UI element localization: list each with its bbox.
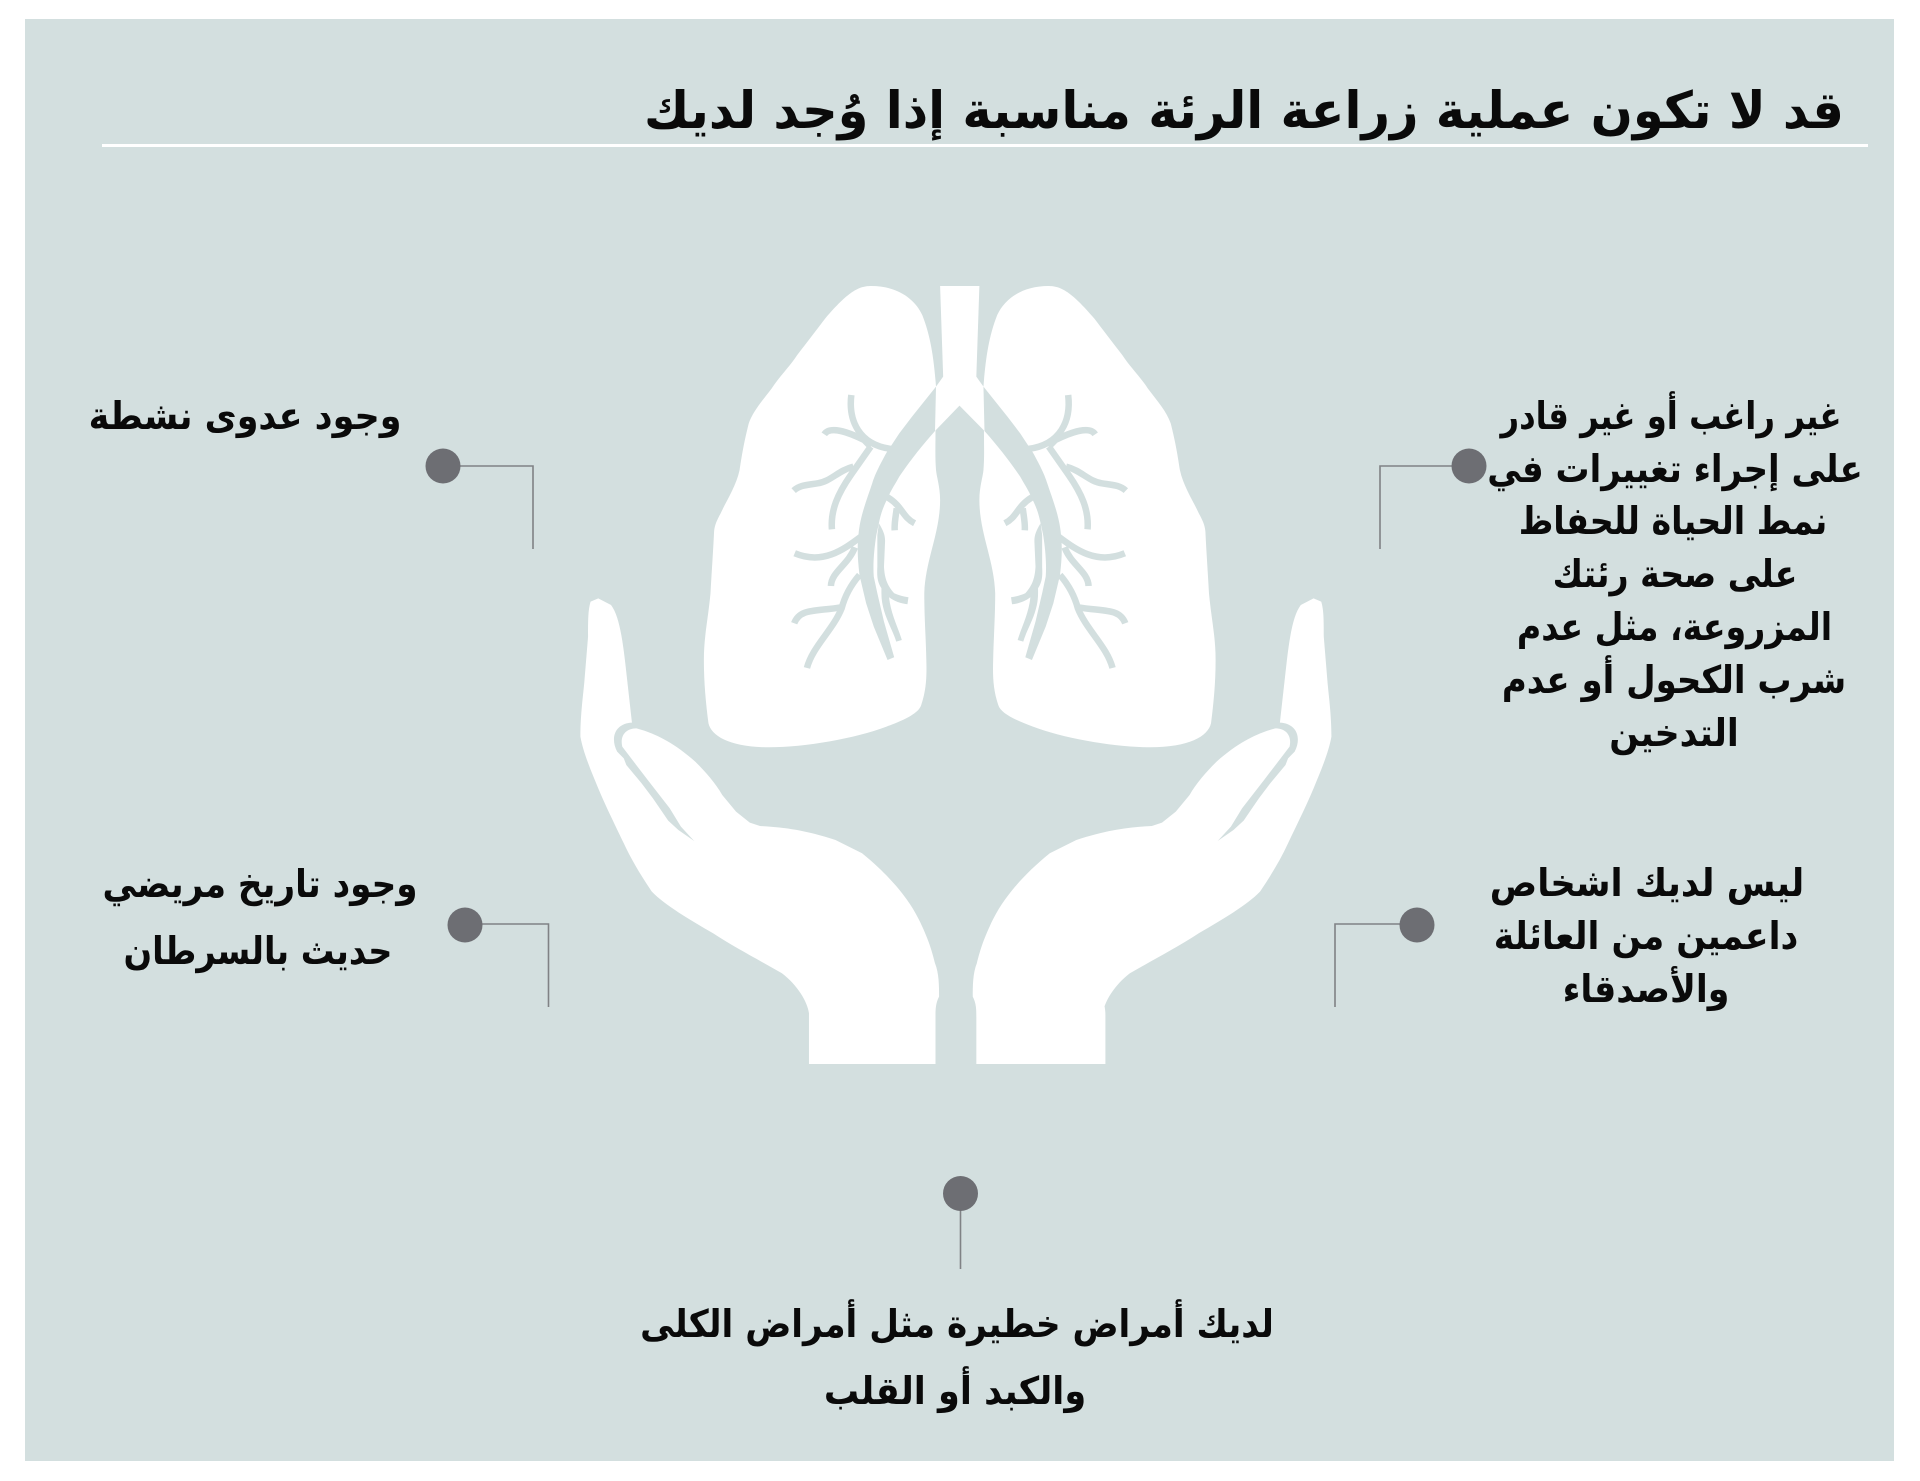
left hand <box>580 598 939 1064</box>
callout: lifestyle changes <box>1380 391 1863 755</box>
callout: no family support: داعمين من العائلة <box>1494 913 1798 958</box>
right hand <box>973 598 1331 1064</box>
right lung <box>979 286 1216 747</box>
callout: recent cancer history <box>103 861 549 1007</box>
callout: serious diseases: لديك أمراض خطيرة مثل أمراض الكلى <box>640 1299 1274 1346</box>
callout: serious diseases: والكبد أو القلب <box>824 1366 1086 1413</box>
callout: lifestyle changes: على إجراء تغييرات في <box>1487 448 1863 491</box>
icon: supporting hands <box>580 598 1331 1064</box>
callout: lifestyle changes: التدخين <box>1609 710 1739 755</box>
callout: lifestyle changes: المزروعة، مثل عدم <box>1517 606 1832 650</box>
title: قد لا تكون عملية زراعة الرئة مناسبة إذا وُجد لديك <box>644 80 1844 141</box>
left lung <box>704 286 940 747</box>
callout: recent cancer history: حديث بالسرطان <box>124 930 392 974</box>
callout: recent cancer history: وجود تاريخ مريضي <box>103 861 417 906</box>
callout: serious diseases <box>640 1176 1274 1413</box>
callout: lifestyle changes: نمط الحياة للحفاظ <box>1519 500 1827 544</box>
callout: no family support <box>1335 861 1804 1011</box>
callout: lifestyle changes: على صحة رئتك <box>1553 553 1797 597</box>
icon: lungs <box>704 286 1216 747</box>
callout: no family support: ليس لديك اشخاص <box>1490 861 1804 905</box>
trachea <box>935 286 984 431</box>
callout: lifestyle changes: شرب الكحول أو عدم <box>1502 655 1846 702</box>
callout: active infection <box>89 394 533 549</box>
callout: active infection: وجود عدوى نشطة <box>89 394 401 438</box>
callout: no family support: والأصدقاء <box>1563 966 1729 1011</box>
callout: lifestyle changes: غير راغب أو غير قادر <box>1499 391 1842 439</box>
